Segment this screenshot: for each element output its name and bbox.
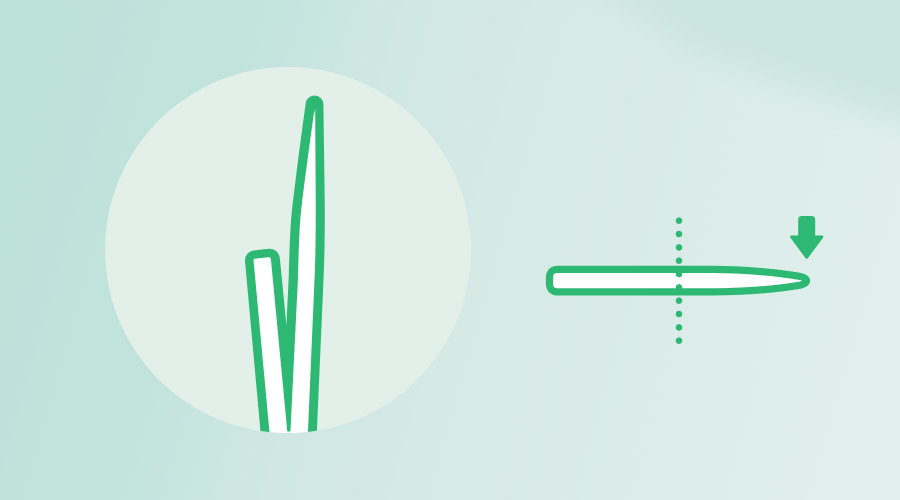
tall blade fill [290,108,316,440]
short blade fill [254,257,288,440]
dotted cut line [676,217,682,344]
flat blade cross-section [550,269,806,292]
panel: circle with upright grass blades [105,67,471,440]
arrow pointing down at blade tip [790,216,823,259]
tall blade outline [286,100,320,440]
short blade outline [250,253,292,440]
grass blades, clipped to the circle [250,100,320,440]
